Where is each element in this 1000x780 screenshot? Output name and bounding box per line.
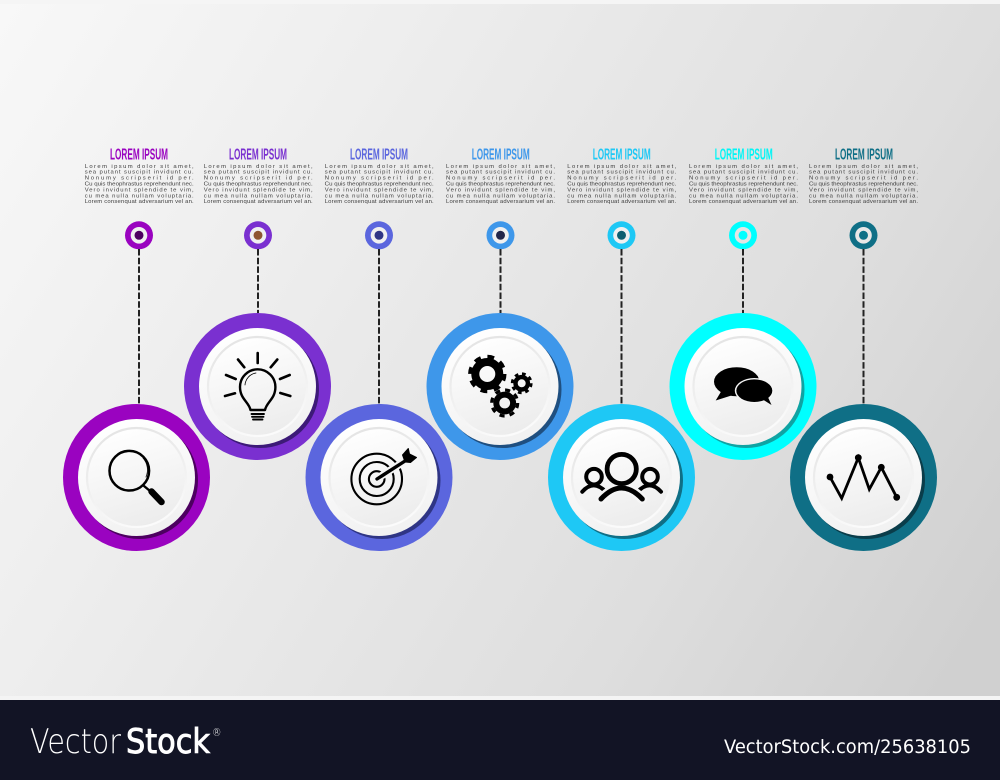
ring 6 [670, 313, 816, 460]
text block 4: sea putant suscipit invidunt cu. [446, 170, 555, 176]
ring 5 [548, 404, 695, 551]
step 7: line chart [790, 146, 937, 551]
bottom light strip [0, 696, 1000, 700]
heading 7: LOREM IPSUM [835, 146, 893, 163]
marker 5 [608, 221, 636, 249]
text block 7: Nonumy scripserit id per. [809, 176, 918, 182]
text block 6 [689, 164, 798, 205]
text block 3: Lorem consenquat adversarium vel an. [325, 199, 434, 205]
marker 6 [729, 221, 757, 249]
top band [0, 0, 1000, 4]
text block 7: Lorem consenquat adversarium vel an. [809, 199, 918, 205]
heading 5: LOREM IPSUM [593, 146, 651, 163]
heading 6: LOREM IPSUM [715, 146, 773, 163]
connector 7 [862, 249, 864, 404]
text block 4: Lorem ipsum dolor sit amet, [446, 164, 555, 170]
text block 1: cu mea nulla nullam voluptaria. [85, 193, 194, 199]
text block 7: Lorem ipsum dolor sit amet, [809, 164, 918, 170]
text block 5: sea putant suscipit invidunt cu. [567, 170, 677, 176]
footer logo: ® [212, 726, 222, 739]
icon: target [351, 448, 416, 504]
text block 6: Lorem consenquat adversarium vel an. [689, 199, 798, 205]
text block 4: Cu quis theophrastus reprehendunt nec. [446, 182, 555, 188]
icon: magnifier [110, 451, 162, 502]
text block 5: Cu quis theophrastus reprehendunt nec. [567, 182, 677, 188]
heading 3: LOREM IPSUM [350, 146, 408, 163]
text block 6: Nonumy scripserit id per. [689, 176, 798, 182]
connector 6 [742, 249, 744, 313]
text block 5 [567, 164, 677, 205]
text block 5: Lorem consenquat adversarium vel an. [567, 199, 677, 205]
footer logo: Vector [30, 722, 121, 762]
step 4: gears [426, 146, 574, 460]
connector 2 [257, 249, 259, 313]
connector 5 [620, 249, 622, 404]
heading 4: LOREM IPSUM [472, 146, 530, 163]
text block 1: sea putant suscipit invidunt cu. [85, 170, 194, 176]
ring 1 [63, 404, 210, 551]
text block 4: Lorem consenquat adversarium vel an. [446, 199, 555, 205]
text block 1 [85, 164, 194, 205]
text block 7: Cu quis theophrastus reprehendunt nec. [809, 182, 918, 188]
ring 4 [426, 313, 574, 460]
marker 4 [486, 221, 514, 249]
text block 4: Vero invidunt splendide te vim, [446, 187, 555, 193]
footer image id: VectorStock.com/25638105 [724, 736, 971, 758]
text block 3: Lorem ipsum dolor sit amet, [325, 164, 434, 170]
icon: team [582, 454, 661, 499]
ring 3 [306, 404, 452, 551]
footer logo: Stock [126, 722, 210, 762]
connector 3 [378, 249, 380, 404]
connector 4 [500, 249, 502, 313]
icon: speech bubbles [714, 367, 774, 405]
text block 3: Nonumy scripserit id per. [325, 176, 434, 182]
icon: line chart [827, 454, 900, 501]
text block 2 [204, 164, 313, 205]
text block 4 [446, 164, 555, 205]
footer bar [0, 700, 1000, 780]
text block 1: Cu quis theophrastus reprehendunt nec. [85, 182, 194, 188]
heading 2: LOREM IPSUM [229, 146, 287, 163]
text block 5: Lorem ipsum dolor sit amet, [567, 164, 677, 170]
text block 2: Cu quis theophrastus reprehendunt nec. [204, 182, 313, 188]
text block 4: Nonumy scripserit id per. [446, 176, 555, 182]
text block 4: cu mea nulla nullam voluptaria. [446, 193, 555, 199]
text block 6: Cu quis theophrastus reprehendunt nec. [689, 182, 798, 188]
text block 2: cu mea nulla nullam voluptaria. [204, 193, 313, 199]
icon: light bulb [225, 353, 290, 420]
icon: gears [470, 357, 531, 416]
text block 5: Nonumy scripserit id per. [567, 176, 677, 182]
text block 2: Nonumy scripserit id per. [204, 176, 313, 182]
ring 7 [790, 404, 937, 551]
text block 5: cu mea nulla nullam voluptaria. [567, 193, 677, 199]
text block 2: Lorem ipsum dolor sit amet, [204, 164, 313, 170]
text block 3: Cu quis theophrastus reprehendunt nec. [325, 182, 434, 188]
text block 7: sea putant suscipit invidunt cu. [809, 170, 918, 176]
text block 3: sea putant suscipit invidunt cu. [325, 170, 434, 176]
step 3: target [306, 146, 452, 551]
heading 1: LOREM IPSUM [110, 146, 168, 163]
text block 1: Vero invidunt splendide te vim, [85, 187, 194, 193]
text block 6: Lorem ipsum dolor sit amet, [689, 164, 798, 170]
text block 2: Lorem consenquat adversarium vel an. [204, 199, 313, 205]
marker 2 [244, 221, 272, 249]
marker 3 [365, 221, 393, 249]
text block 1: Lorem consenquat adversarium vel an. [85, 199, 194, 205]
text block 1: Nonumy scripserit id per. [85, 176, 194, 182]
text block 7: Vero invidunt splendide te vim, [809, 187, 918, 193]
text block 3: Vero invidunt splendide te vim, [325, 187, 434, 193]
ring 2 [184, 313, 331, 460]
text block 3 [325, 164, 434, 205]
marker 7 [850, 221, 878, 249]
connector 1 [138, 249, 140, 404]
footer logo [30, 722, 222, 762]
text block 2: Vero invidunt splendide te vim, [204, 187, 313, 193]
text block 7: cu mea nulla nullam voluptaria. [809, 193, 918, 199]
text block 3: cu mea nulla nullam voluptaria. [325, 193, 434, 199]
text block 6: sea putant suscipit invidunt cu. [689, 170, 798, 176]
text block 7 [809, 164, 918, 205]
step 1: search [63, 146, 210, 551]
text block 1: Lorem ipsum dolor sit amet, [85, 164, 194, 170]
step 6: chat [670, 146, 816, 460]
text block 6: cu mea nulla nullam voluptaria. [689, 193, 798, 199]
text block 6: Vero invidunt splendide te vim, [689, 187, 798, 193]
text block 5: Vero invidunt splendide te vim, [567, 187, 677, 193]
step 5: team [548, 146, 695, 551]
text block 2: sea putant suscipit invidunt cu. [204, 170, 313, 176]
step 2: idea [184, 146, 331, 460]
marker 1 [125, 221, 153, 249]
